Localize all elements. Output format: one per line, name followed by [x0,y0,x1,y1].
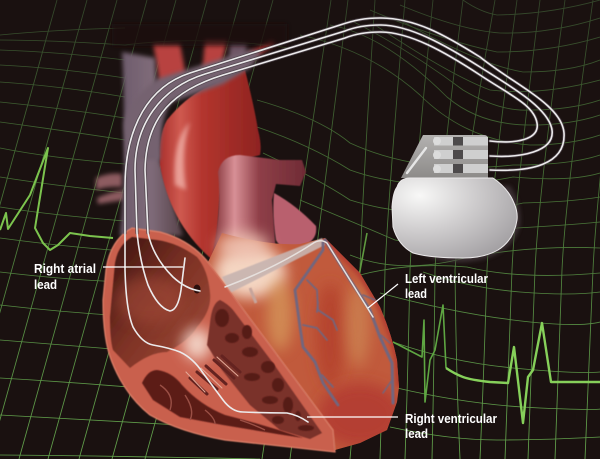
ECG trace: left [0,148,113,250]
heart front surface [208,233,399,450]
right ventricle upper cavity [207,300,322,439]
header block [401,135,488,178]
coronary veins [295,240,393,405]
lead sheath band [124,50,262,160]
pulmonary artery [212,155,306,255]
right ventricle lower cavity [142,370,303,438]
header slot [407,148,426,173]
label: right ventricular lead [307,411,497,441]
aorta [160,70,261,262]
label: right atrial lead: Right atrial [34,261,96,276]
label: right atrial lead: lead [34,277,57,292]
papillary strands [186,356,240,394]
cut section wall [103,228,335,452]
pacemaker generator [392,135,520,262]
pale branch [250,288,256,303]
label: left ventricular lead: Left ventricular [405,271,488,286]
right atrium chamber [110,237,210,368]
pacing leads [125,18,564,422]
pale glow at top of ventricle [217,232,269,260]
superior vena cava [120,52,183,236]
pulmonary veins, left [96,174,124,204]
label: left ventricular lead [368,271,488,308]
bright part of trace [446,323,600,423]
lead shadows [125,18,564,233]
label: right ventricular lead: Right ventricular [405,411,497,426]
trabecular honeycomb [215,309,314,431]
generator shadow [395,186,520,262]
aorta highlight [175,122,190,190]
label: right atrial lead [34,261,183,292]
titanium body [392,178,517,258]
septum highlight [183,328,211,360]
right ventricular lead [125,18,564,422]
thin faint spike behind heart [359,233,367,276]
label: right ventricular lead: lead [405,426,428,441]
connector ports [433,137,488,173]
ECG trace: right [359,233,600,423]
pale great-vein band [222,238,325,293]
heart illustration [96,24,405,455]
right atrial lead [135,25,552,311]
aortic arch branches [153,40,276,85]
label: left ventricular lead: lead [405,286,427,301]
left ventricular lead [145,32,537,291]
coronary sinus opening [194,284,200,294]
left atrial appendage [273,193,316,248]
lead inside coronary veins [225,241,373,317]
atrial bulge shading [116,276,184,324]
top fade over vessels [112,24,287,46]
thin part of trace [393,305,446,402]
